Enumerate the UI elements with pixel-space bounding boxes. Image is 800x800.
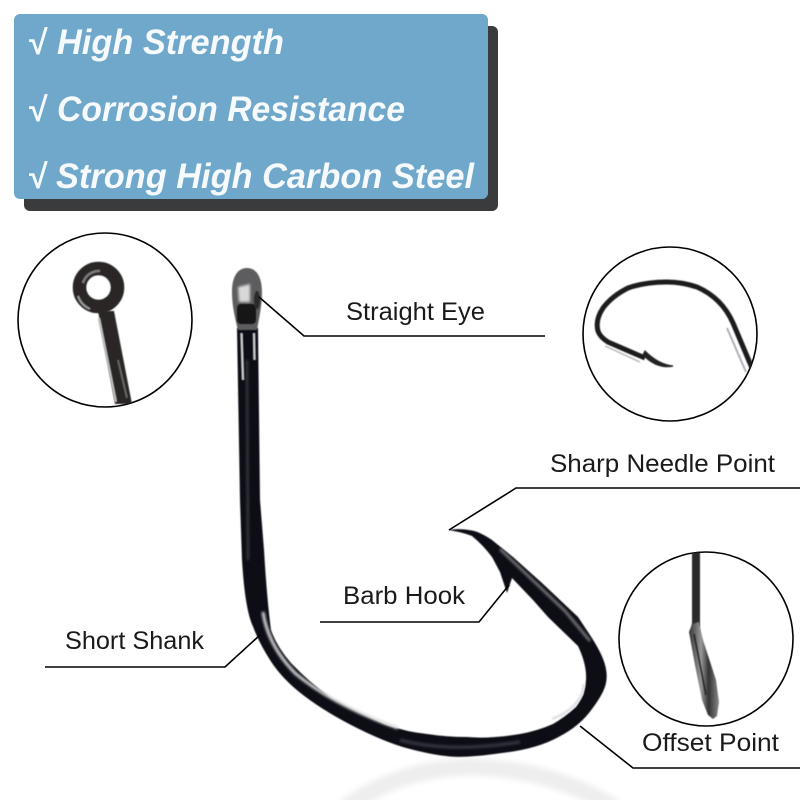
eye hole shadow — [254, 291, 260, 309]
magnified eye ring — [78, 268, 118, 309]
circle outline — [619, 552, 793, 726]
circle outline — [583, 247, 757, 421]
feature: strong high carbon steel: Strong High Carbon Steel — [56, 157, 475, 196]
leader line — [320, 585, 509, 622]
magnified shank and point — [689, 552, 719, 719]
hook body — [237, 328, 607, 757]
callout circle: eye detail — [18, 233, 192, 407]
eye bright patch — [238, 284, 250, 302]
feature: strong high carbon steel: √ — [27, 158, 48, 196]
callout circle: hook point detail — [583, 247, 757, 421]
panel shadow — [24, 26, 498, 211]
label: offset point — [580, 726, 800, 768]
label text: Offset Point — [642, 729, 779, 757]
label: short shank — [45, 627, 260, 667]
feature: high strength: High Strength — [57, 23, 284, 62]
label text: Barb Hook — [343, 582, 466, 610]
label text: Sharp Needle Point — [550, 450, 775, 478]
magnified hook curve — [597, 282, 752, 372]
shank stripe — [247, 360, 248, 560]
leader line — [449, 488, 800, 530]
leader line — [45, 635, 260, 667]
label: sharp needle point — [449, 450, 800, 530]
label text: Straight Eye — [346, 298, 485, 326]
bottom sheen — [400, 740, 520, 747]
label text: Short Shank — [65, 627, 204, 655]
point highlight — [500, 549, 590, 641]
label: barb hook — [320, 582, 509, 622]
inner curve highlight — [552, 684, 584, 719]
feature: high strength: √ — [27, 24, 48, 62]
hook eye — [232, 268, 262, 330]
callout circle: offset point detail — [619, 552, 793, 726]
shank highlights — [242, 333, 254, 380]
panel background — [14, 14, 488, 199]
eye dark patch — [237, 304, 256, 324]
feature: corrosion resistance: Corrosion Resistance — [57, 90, 405, 129]
circle outline — [18, 233, 192, 407]
bend highlight — [263, 612, 398, 728]
label: straight eye — [259, 297, 545, 336]
leader line — [259, 297, 545, 336]
panel: feature list — [14, 14, 498, 211]
leader line — [580, 726, 800, 768]
main hook illustration — [232, 268, 607, 757]
magnified shank — [98, 311, 132, 404]
hook reflection on the ground — [345, 767, 615, 800]
feature: corrosion resistance: √ — [27, 91, 48, 129]
